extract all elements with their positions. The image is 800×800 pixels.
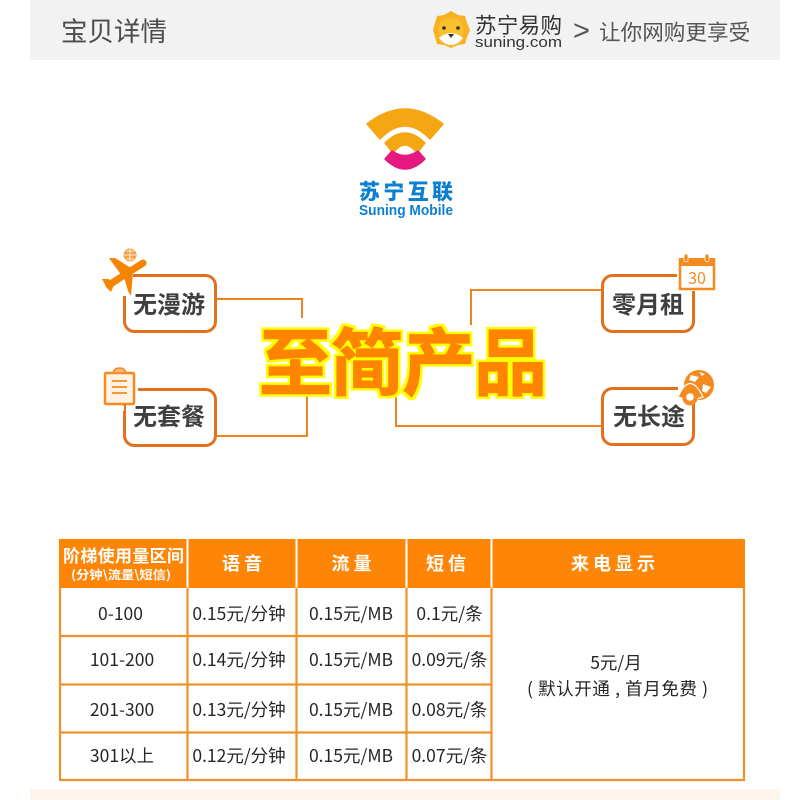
caller id price: 5元/月 xyxy=(590,650,642,675)
label: 无漫游 xyxy=(133,285,205,320)
table header: (分钟\流量\短信) xyxy=(71,566,171,583)
row: 101-200: 101-200 xyxy=(90,647,154,672)
icon: clipboard xyxy=(105,368,138,411)
label: 零月租 xyxy=(612,285,684,320)
suning mobile logo xyxy=(359,109,453,219)
row: 101-200: 0.09元/条 xyxy=(412,647,487,672)
table header: 短信 xyxy=(426,550,470,576)
brand name: 苏宁互联 xyxy=(359,176,453,206)
label: 无套餐 xyxy=(133,397,205,432)
row: 301+: 301以上 xyxy=(90,743,154,768)
row: 301+: 0.15元/MB xyxy=(309,743,393,768)
icon: globe and telephone xyxy=(678,370,714,406)
row: 101-200: 0.14元/分钟 xyxy=(192,647,286,672)
row: 301+: 0.12元/分钟 xyxy=(192,743,286,768)
row: 201-300 xyxy=(90,697,487,722)
row: 201-300: 0.08元/条 xyxy=(412,697,487,722)
row: 0-100: 0-100 xyxy=(98,601,143,626)
caller id price xyxy=(527,650,708,701)
row: 101-200 xyxy=(90,647,487,672)
feature: no long distance xyxy=(602,370,714,444)
row: 201-300: 201-300 xyxy=(90,697,154,722)
pricing table xyxy=(59,539,745,780)
table header: 来电显示 xyxy=(571,550,659,576)
header bar xyxy=(30,0,780,60)
row: 0-100: 0.15元/MB xyxy=(309,601,393,626)
row: 101-200: 0.15元/MB xyxy=(309,647,393,672)
connector lines xyxy=(217,290,602,436)
slogan: 让你网购更享受 xyxy=(599,16,750,47)
suning wordmark: 苏宁易购 xyxy=(475,9,562,40)
main title: 至简产品 xyxy=(259,305,547,411)
table header xyxy=(59,539,745,588)
slogan: > xyxy=(573,15,590,47)
table header: 流量 xyxy=(332,550,376,576)
table header: 阶梯使用量区间 xyxy=(63,542,184,567)
table header: 语音 xyxy=(222,550,266,576)
icon: wifi signal xyxy=(367,109,443,169)
table grid xyxy=(60,588,744,780)
row: 201-300: 0.15元/MB xyxy=(309,697,393,722)
row: 0-100: 0.15元/分钟 xyxy=(192,601,286,626)
suning wordmark: suning.com xyxy=(475,35,562,51)
row: 0-100 xyxy=(98,601,483,626)
feature: no roaming xyxy=(100,248,216,332)
icon: airplane and globe xyxy=(100,248,143,296)
row: 301+: 0.07元/条 xyxy=(412,743,487,768)
row: 0-100: 0.1元/条 xyxy=(416,601,483,626)
icon: suning lion logo xyxy=(433,11,470,48)
bottom band xyxy=(30,789,780,800)
caller id price: ( 默认开通 , 首月免费 ) xyxy=(527,676,708,701)
feature: no monthly fee xyxy=(602,254,716,332)
row: 201-300: 0.13元/分钟 xyxy=(192,697,286,722)
icon: calendar 30: 30 xyxy=(688,265,706,289)
feature: no package xyxy=(105,368,216,446)
header title: 宝贝详情 xyxy=(61,10,167,49)
row: 301+ xyxy=(90,743,487,768)
suning mobile logo: Suning Mobile xyxy=(359,203,453,219)
label: 无长途 xyxy=(613,397,685,432)
